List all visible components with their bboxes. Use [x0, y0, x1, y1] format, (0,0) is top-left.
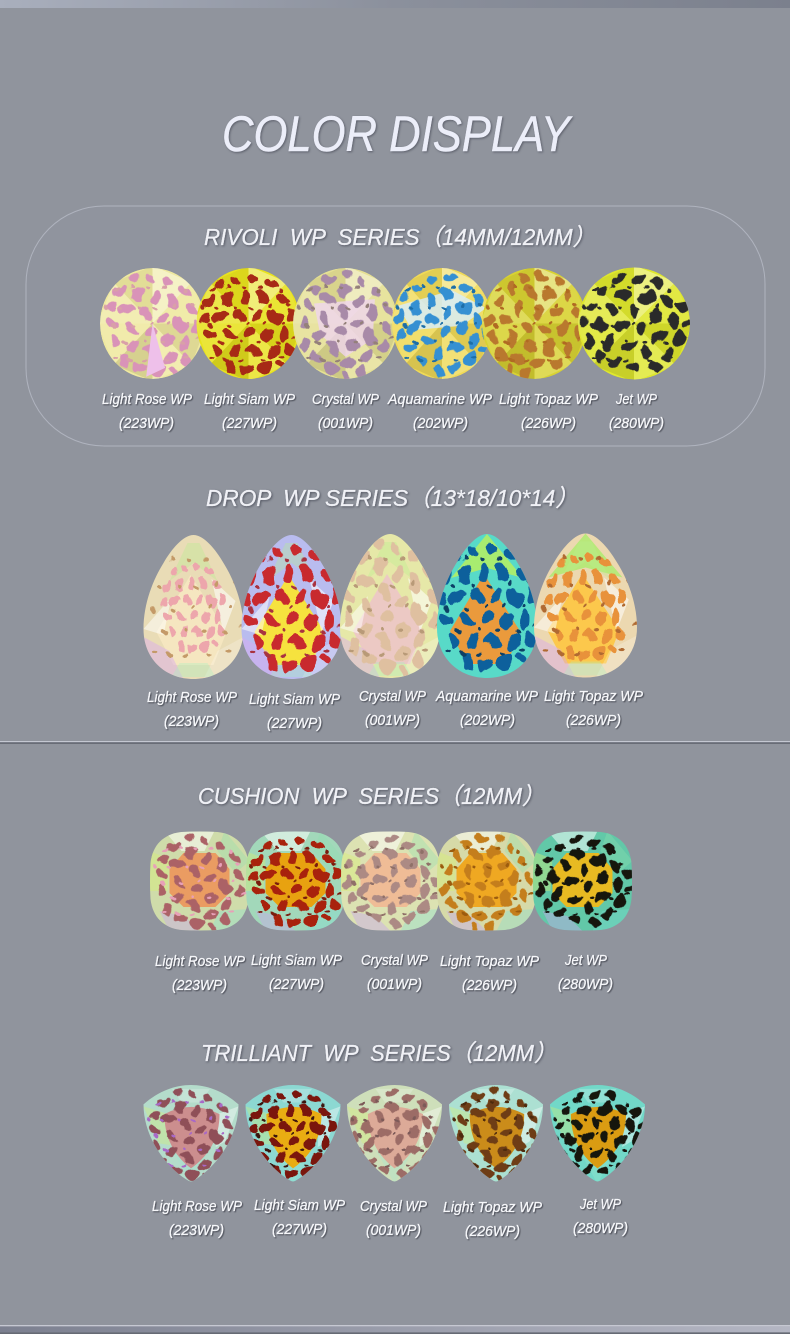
labels: drop: Light Rose WP	[147, 689, 237, 706]
labels: drop: Light Siam WP	[249, 691, 340, 708]
gem: cushion crystal	[341, 832, 438, 930]
labels: trilliant: (223WP)	[169, 1222, 224, 1239]
gem: trilliant crystal	[347, 1085, 442, 1182]
gem: trilliant light topaz	[449, 1085, 543, 1182]
gem: drop crystal	[340, 534, 438, 678]
gem: drop light topaz	[532, 534, 639, 678]
labels: trilliant: (227WP)	[272, 1221, 327, 1238]
labels: rivoli: Crystal WP	[312, 391, 379, 408]
gem: trilliant light rose	[144, 1085, 238, 1182]
heading: rivoli: RIVOLI WP SERIES（14MM/12MM）	[204, 224, 595, 250]
labels: rivoli: (227WP)	[222, 415, 277, 432]
labels: drop: Crystal WP	[359, 688, 426, 705]
heading: cushion: CUSHION WP SERIES（12MM）	[198, 783, 544, 809]
labels: drop: (223WP)	[164, 713, 219, 730]
section: drop series	[143, 485, 643, 732]
heading: drop: DROP WP SERIES（13*18/10*14）	[206, 485, 578, 511]
labels: trilliant: (280WP)	[573, 1220, 628, 1237]
labels: cushion: Light Topaz WP	[440, 953, 539, 970]
labels: rivoli: (223WP)	[119, 415, 174, 432]
gem: trilliant jet	[550, 1085, 645, 1182]
labels: trilliant	[152, 1196, 628, 1240]
labels: trilliant: Light Topaz WP	[443, 1199, 542, 1216]
gem: rivoli light siam	[196, 268, 297, 379]
labels: drop: Aquamarine WP	[435, 688, 538, 705]
labels: rivoli: (202WP)	[413, 415, 468, 432]
labels: trilliant: (001WP)	[366, 1222, 421, 1239]
labels: rivoli: Light Rose WP	[102, 391, 192, 408]
labels: rivoli: Jet WP	[615, 391, 657, 408]
labels: drop	[147, 688, 643, 732]
labels: rivoli: (001WP)	[318, 415, 373, 432]
panel outline	[26, 206, 765, 446]
gem: cushion light siam	[246, 831, 346, 931]
gem: trilliant light siam	[246, 1085, 340, 1184]
section: cushion series	[137, 783, 649, 994]
divider line	[0, 741, 790, 744]
labels: cushion: (223WP)	[172, 977, 227, 994]
labels: cushion: Light Siam WP	[251, 952, 342, 969]
labels: drop: (227WP)	[267, 715, 322, 732]
labels: cushion: Jet WP	[564, 952, 607, 969]
labels: cushion: (227WP)	[269, 976, 324, 993]
gem: drop light siam	[240, 535, 343, 679]
labels: cushion: Crystal WP	[361, 952, 428, 969]
gem: cushion light rose	[150, 832, 248, 930]
labels: rivoli: Light Topaz WP	[499, 391, 598, 408]
labels: trilliant: Jet WP	[579, 1196, 621, 1213]
labels: cushion: Light Rose WP	[155, 953, 245, 970]
gem: rivoli aquamarine	[392, 268, 487, 379]
labels: drop: (226WP)	[566, 712, 621, 729]
labels: trilliant: Light Siam WP	[254, 1197, 345, 1214]
labels: rivoli: Aquamarine WP	[387, 391, 492, 408]
title: COLOR DISPLAY	[222, 106, 573, 162]
labels: drop: (202WP)	[460, 712, 515, 729]
gem: rivoli crystal	[293, 268, 395, 379]
gem: cushion jet	[533, 832, 632, 930]
labels: cushion: (226WP)	[462, 977, 517, 994]
labels: drop: (001WP)	[365, 712, 420, 729]
section: trilliant series	[134, 1040, 658, 1240]
labels: trilliant: Crystal WP	[360, 1198, 427, 1215]
panel: rivoli series	[26, 206, 765, 446]
labels: rivoli: (226WP)	[521, 415, 576, 432]
labels: cushion: (001WP)	[367, 976, 422, 993]
gem: rivoli light topaz	[482, 268, 582, 379]
gem: rivoli jet	[578, 268, 690, 380]
labels: trilliant: (226WP)	[465, 1223, 520, 1240]
gem: drop light rose	[143, 535, 244, 679]
gem: cushion light topaz	[437, 832, 534, 930]
labels: trilliant: Light Rose WP	[152, 1198, 242, 1215]
heading: trilliant: TRILLIANT WP SERIES（12MM）	[201, 1040, 556, 1066]
labels: rivoli: Light Siam WP	[204, 391, 295, 408]
labels: rivoli	[102, 391, 664, 432]
gem: rivoli light rose	[100, 268, 201, 379]
labels: cushion: (280WP)	[558, 976, 613, 993]
top texture band	[0, 0, 790, 8]
labels: cushion	[155, 952, 613, 994]
bottom texture band	[0, 1325, 790, 1334]
labels: rivoli: (280WP)	[609, 415, 664, 432]
gem: drop aquamarine	[435, 534, 539, 678]
labels: drop: Light Topaz WP	[544, 688, 643, 705]
